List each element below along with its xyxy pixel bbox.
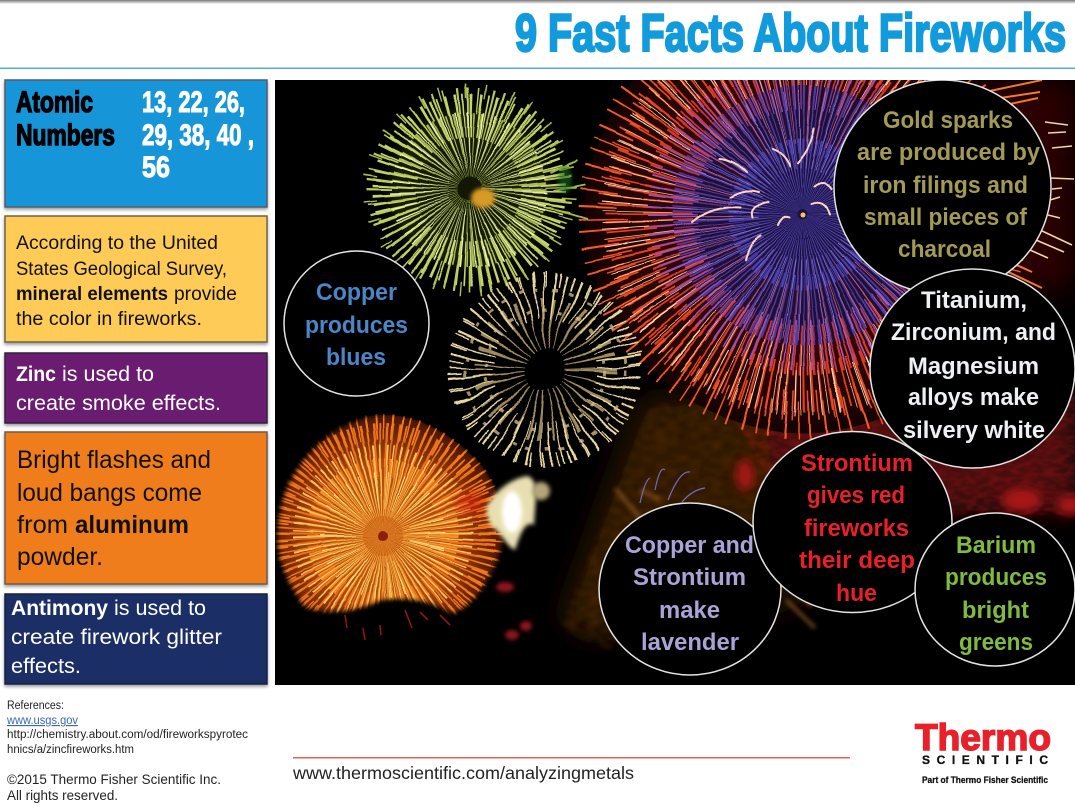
lavender spark trails [640,469,705,503]
panel: zinc: is used to [62,363,154,386]
callout: barium greens [915,513,1075,666]
callout: copper and strontium lavender [599,503,781,675]
panel: antimony: create firework glitter [11,626,222,649]
callout: titanium zirconium magnesium: silvery white [903,417,1045,444]
panel: aluminum: from [17,511,68,539]
panel: zinc: Zinc [16,363,56,386]
panel: aluminum [5,432,267,584]
references [6,700,248,756]
callout: gold sparks: Gold sparks [883,107,1013,134]
top shadow bar [0,0,1075,4]
website link with rule: www.thermoscientific.com/analyzingmetals [292,763,634,783]
logo: thermo scientific: SCIENTIFIC [922,753,1048,767]
firework: gold burst [447,272,643,468]
background glows [560,80,1075,640]
panel: zinc [5,353,267,423]
panel: antimony [5,594,267,684]
atomic number values: 56 [142,151,170,184]
copyright [7,772,221,803]
callout: copper blues: Copper [316,279,397,306]
callout: gold sparks: iron filings and [863,172,1028,199]
callout: titanium zirconium magnesium [870,269,1075,468]
outer sparks right of the gold circle [985,80,1074,288]
firework: orange burst [275,414,505,616]
heading: atomic numbers [16,86,115,152]
references: hnics/a/zincfireworks.htm [7,744,134,756]
callout: strontium red: fireworks [804,515,909,542]
panel: atomic numbers [5,80,267,207]
callout: barium greens: greens [959,629,1033,656]
heading: atomic numbers: Atomic [16,86,93,119]
callout: barium greens: bright [962,597,1029,624]
firework: green burst [354,74,588,306]
callout: gold sparks: charcoal [898,236,991,263]
copyright: All rights reserved. [7,788,118,803]
callout: gold sparks [834,80,1051,294]
callout: titanium zirconium magnesium: alloys make [908,384,1039,411]
atomic number values [142,86,254,184]
panel: usgs mineral elements [5,216,267,342]
callout: copper and strontium lavender: Strontium [633,564,746,591]
callout: titanium zirconium magnesium: Zirconium, and [891,319,1056,346]
references: References: [7,700,64,712]
firework: big red and blue burst [563,0,1043,455]
panel: antimony: effects. [11,655,81,678]
callout: copper blues: blues [326,344,386,371]
callout: strontium red: their deep [799,547,915,574]
callout: gold sparks: are produced by [857,139,1041,166]
panel: usgs mineral elements: mineral elements [16,284,168,305]
copyright: ©2015 Thermo Fisher Scientific Inc. [7,772,221,787]
pale curved spark tips [692,130,832,260]
heading: atomic numbers: Numbers [16,119,115,152]
callout: copper and strontium lavender: Copper and [625,532,754,559]
logo: thermo scientific: Part of Thermo Fisher Scientific [922,775,1048,785]
callout: barium greens: Barium [956,532,1036,559]
logo: thermo scientific: Thermo [915,717,1051,758]
panel: usgs mineral elements: the color in fireworks. [16,309,202,330]
callout: gold sparks: small pieces of [864,204,1028,231]
fireworks photo [275,80,1075,685]
callout: strontium red: gives red [807,482,905,509]
panel: usgs mineral elements: provide [174,284,237,305]
panel: usgs mineral elements: According to the United [16,233,218,254]
panel: aluminum: loud bangs come [17,479,202,507]
callout: copper blues: produces [305,312,408,339]
panel: aluminum: powder. [17,543,103,571]
logo: thermo scientific [915,717,1051,785]
panel: antimony: is used to [114,597,206,620]
callout: strontium red [753,432,952,612]
callout: barium greens: produces [945,564,1047,591]
callout: titanium zirconium magnesium: Magnesium [908,353,1039,380]
callout: copper blues [284,251,429,396]
panel: antimony: Antimony [11,597,108,620]
atomic number values: 29, 38, 40 , [142,119,254,152]
panel: zinc: create smoke effects. [16,392,221,415]
references: http://chemistry.about.com/od/fireworkspyrotec [7,729,248,741]
callout: copper and strontium lavender: make [659,597,720,624]
red embers under orange burst [345,610,450,640]
callout: titanium zirconium magnesium: Titanium, [921,287,1027,314]
callout: strontium red: hue [836,580,877,607]
panel: aluminum: aluminum [75,511,189,539]
references: www.usgs.gov [6,715,78,727]
brown mottled texture [560,400,790,650]
atomic number values: 13, 22, 26, [142,86,245,119]
firework: white flash [486,476,550,550]
callout: copper and strontium lavender: lavender [641,629,739,656]
callout: strontium red: Strontium [801,450,913,477]
panel: usgs mineral elements: States Geological Survey, [16,259,227,280]
panel: aluminum: Bright flashes and [17,446,211,474]
